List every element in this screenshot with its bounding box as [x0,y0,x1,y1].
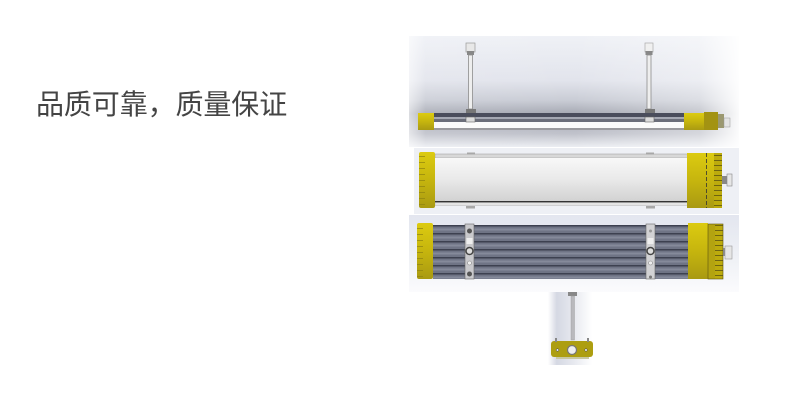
yellow end cap left [419,152,435,208]
mounting clamp right [646,224,655,279]
lamp body front [435,154,688,158]
suspension rod end view [568,292,577,340]
yellow end cap left back [417,223,433,279]
cable gland back [723,246,732,259]
panel: side view with suspension rods [409,36,739,147]
yellow end cap right back [688,223,723,279]
mounting clamp left [465,224,474,279]
mounting tabs front [466,152,655,208]
panel: end view [548,292,593,365]
lamp body side view [418,112,730,130]
panel: back view [409,215,739,292]
end cap yellow [551,338,593,359]
finned heat sink [433,225,689,279]
panel: front view [414,148,739,214]
cable gland front [722,174,732,186]
yellow end cap right [687,153,722,208]
suspension rod left [466,43,476,117]
suspension rod right [645,43,655,117]
title: 品质可靠，质量保证 [36,89,287,120]
